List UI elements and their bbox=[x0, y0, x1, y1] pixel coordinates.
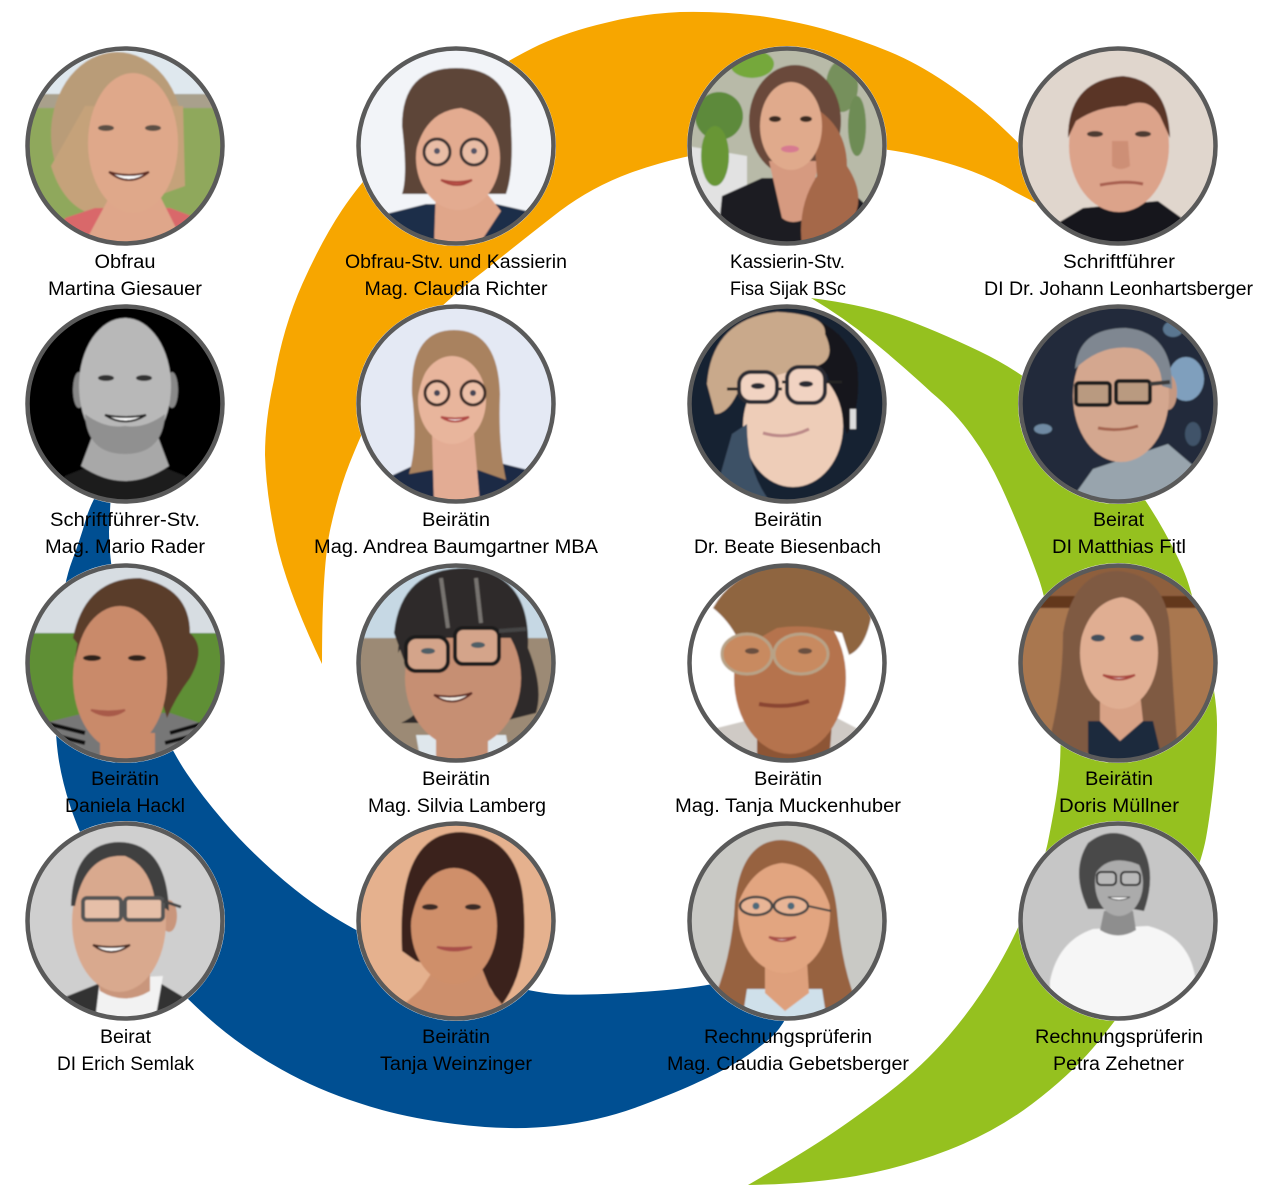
caption: Matthias Fitl: DI Matthias Fitl bbox=[1052, 537, 1186, 558]
swoosh: blue arc bbox=[55, 470, 800, 1128]
portrait: Fisa Sijak bbox=[687, 46, 887, 246]
caption: Tanja Weinzinger bbox=[380, 1027, 533, 1075]
caption: Mario Rader: Mag. Mario Rader bbox=[45, 537, 206, 558]
person: Tanja Weinzinger bbox=[356, 821, 556, 1075]
caption: Andrea Baumgartner: Mag. Andrea Baumgartner MBA bbox=[314, 537, 598, 558]
portrait: Johann Leonhartsberger bbox=[1018, 46, 1218, 246]
portrait: Andrea Baumgartner bbox=[356, 304, 556, 504]
person: Claudia Gebetsberger bbox=[667, 821, 910, 1075]
caption: Petra Zehetner: Rechnungsprüferin bbox=[1035, 1027, 1203, 1048]
portrait: Daniela Hackl bbox=[25, 563, 225, 763]
caption: Mario Rader: Schriftführer-Stv. bbox=[50, 510, 200, 531]
person: Silvia Lamberg bbox=[356, 563, 556, 817]
caption: Doris Müllner bbox=[1059, 769, 1180, 817]
portrait: Tanja Muckenhuber bbox=[687, 563, 887, 763]
caption: Doris Müllner: Beirätin bbox=[1085, 769, 1153, 790]
caption: Fisa Sijak bbox=[730, 252, 846, 300]
caption: Martina Giesauer bbox=[48, 252, 203, 300]
caption: Claudia Gebetsberger bbox=[667, 1027, 910, 1075]
caption: Beate Biesenbach: Beirätin bbox=[754, 510, 822, 531]
person: Petra Zehetner bbox=[1018, 821, 1218, 1075]
caption: Beate Biesenbach bbox=[694, 510, 881, 558]
person: Johann Leonhartsberger bbox=[984, 46, 1254, 300]
caption: Silvia Lamberg bbox=[368, 769, 546, 817]
caption: Claudia Richter: Obfrau-Stv. und Kassierin bbox=[345, 252, 567, 273]
caption: Fisa Sijak: Kassierin-Stv. bbox=[730, 252, 845, 273]
caption: Daniela Hackl: Beirätin bbox=[91, 769, 159, 790]
caption: Daniela Hackl bbox=[65, 769, 185, 817]
caption: Silvia Lamberg: Mag. Silvia Lamberg bbox=[368, 796, 546, 817]
caption: Martina Giesauer: Martina Giesauer bbox=[48, 279, 203, 300]
person: Doris Müllner bbox=[1018, 563, 1218, 817]
caption: Mario Rader bbox=[45, 510, 206, 558]
caption: Martina Giesauer: Obfrau bbox=[94, 252, 156, 273]
caption: Petra Zehetner bbox=[1035, 1027, 1203, 1075]
caption: Andrea Baumgartner bbox=[314, 510, 598, 558]
portrait: Claudia Gebetsberger bbox=[687, 821, 887, 1021]
portrait: Petra Zehetner bbox=[1018, 821, 1218, 1021]
caption: Tanja Muckenhuber: Mag. Tanja Muckenhuber bbox=[675, 796, 902, 817]
caption: Beate Biesenbach: Dr. Beate Biesenbach bbox=[694, 537, 881, 558]
portrait: Doris Müllner bbox=[1018, 563, 1218, 763]
caption: Matthias Fitl: Beirat bbox=[1093, 510, 1145, 531]
person: Claudia Richter bbox=[345, 46, 567, 300]
caption: Tanja Muckenhuber: Beirätin bbox=[754, 769, 822, 790]
caption: Claudia Gebetsberger: Rechnungsprüferin bbox=[704, 1027, 872, 1048]
portrait: Mario Rader bbox=[25, 304, 225, 504]
portrait: Matthias Fitl bbox=[1018, 304, 1218, 504]
caption: Claudia Richter bbox=[345, 252, 567, 300]
caption: Johann Leonhartsberger bbox=[984, 252, 1254, 300]
portrait: Silvia Lamberg bbox=[356, 563, 556, 763]
person: Tanja Muckenhuber bbox=[675, 563, 902, 817]
caption: Fisa Sijak: Fisa Sijak BSc bbox=[730, 279, 846, 300]
caption: Andrea Baumgartner: Beirätin bbox=[422, 510, 490, 531]
portrait: Erich Semlak bbox=[25, 821, 225, 1021]
caption: Doris Müllner: Doris Müllner bbox=[1059, 796, 1180, 817]
caption: Johann Leonhartsberger: Schriftführer bbox=[1063, 252, 1176, 273]
caption: Johann Leonhartsberger: DI Dr. Johann Leonhartsberger bbox=[984, 279, 1254, 300]
caption: Tanja Weinzinger: Beirätin bbox=[422, 1027, 490, 1048]
person: Daniela Hackl bbox=[25, 563, 225, 817]
caption: Erich Semlak: Beirat bbox=[100, 1027, 152, 1048]
person: Beate Biesenbach bbox=[687, 304, 887, 558]
person: Obfrau Martina Giesauer bbox=[25, 46, 225, 300]
portrait: Claudia Richter bbox=[356, 46, 556, 246]
person: Fisa Sijak bbox=[687, 46, 887, 300]
caption: Tanja Weinzinger: Tanja Weinzinger bbox=[380, 1054, 533, 1075]
caption: Tanja Muckenhuber bbox=[675, 769, 902, 817]
caption: Petra Zehetner: Petra Zehetner bbox=[1053, 1054, 1185, 1075]
caption: Claudia Gebetsberger: Mag. Claudia Gebetsberger bbox=[667, 1054, 910, 1075]
swoosh: green arc bbox=[748, 298, 1217, 1185]
caption: Claudia Richter: Mag. Claudia Richter bbox=[364, 279, 548, 300]
portrait: Martina Giesauer bbox=[25, 46, 225, 246]
caption: Erich Semlak: DI Erich Semlak bbox=[57, 1054, 195, 1075]
caption: Daniela Hackl: Daniela Hackl bbox=[65, 796, 185, 817]
portrait: Tanja Weinzinger bbox=[356, 821, 556, 1021]
caption: Erich Semlak bbox=[57, 1027, 195, 1075]
person: Andrea Baumgartner bbox=[314, 304, 598, 558]
person: Erich Semlak bbox=[25, 821, 225, 1075]
person: Mario Rader bbox=[25, 304, 225, 558]
caption: Matthias Fitl bbox=[1052, 510, 1186, 558]
caption: Silvia Lamberg: Beirätin bbox=[422, 769, 490, 790]
person: Matthias Fitl bbox=[1018, 304, 1218, 558]
portrait: Beate Biesenbach bbox=[687, 304, 887, 504]
swoosh: orange arc bbox=[265, 12, 1045, 664]
